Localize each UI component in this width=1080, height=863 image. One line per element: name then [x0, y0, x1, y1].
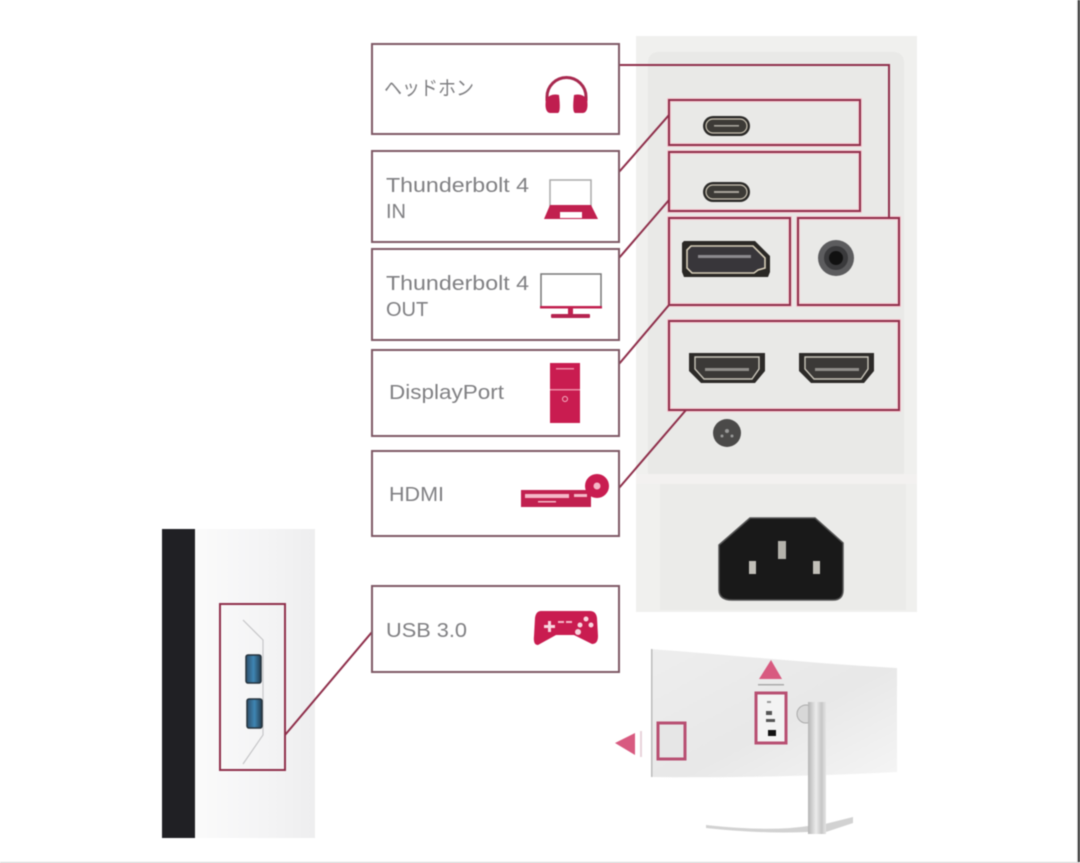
stand base [706, 817, 853, 832]
label text: HDMI [389, 484, 444, 506]
icon: disc player [521, 474, 609, 507]
port: USB-C lower [703, 182, 750, 202]
panel: Thunderbolt IN label [372, 151, 619, 242]
line: Thunderbolt OUT [619, 200, 669, 258]
stand pole [808, 702, 826, 834]
panel: Thunderbolt IN label: IN [386, 201, 406, 223]
frame: HDMI ports [669, 321, 899, 410]
label text: Thunderbolt 4 [386, 273, 529, 295]
panel: side USB photo [162, 529, 315, 838]
label text: DisplayPort [389, 382, 504, 404]
panel: headphone label [372, 44, 619, 134]
panel: rear port photo [636, 36, 917, 612]
screw [713, 419, 741, 447]
panel: monitor rear thumbnail [615, 649, 897, 834]
port: HDMI left [689, 353, 765, 383]
power inlet [719, 518, 843, 600]
port: USB upper [246, 655, 261, 683]
port: DisplayPort [682, 241, 770, 277]
panel: DisplayPort label [372, 350, 619, 436]
port: USB-C upper [703, 116, 750, 136]
marker: side ports [658, 723, 685, 759]
port: audio jack [818, 240, 854, 276]
arrow: left [615, 731, 642, 757]
icon: game controller [534, 611, 598, 645]
line: DisplayPort [619, 305, 669, 364]
frame: Thunderbolt IN port [669, 100, 860, 145]
connector lines and port frames [669, 100, 899, 410]
port: USB lower [247, 699, 262, 728]
line: USB [285, 632, 372, 735]
panel: Thunderbolt OUT label [372, 249, 619, 340]
frame: USB ports [220, 604, 285, 770]
frame: line headphone [619, 65, 889, 218]
line: HDMI [619, 410, 686, 488]
icon: headphones [546, 78, 588, 113]
panel: USB 3.0 label [372, 586, 619, 672]
icon: monitor [540, 274, 602, 318]
label text: USB 3.0 [386, 620, 467, 642]
frame: headphone port [798, 218, 899, 305]
port: HDMI right [799, 353, 874, 383]
arrow: up [758, 660, 784, 686]
marker: rear ports [756, 693, 786, 743]
label text: Thunderbolt 4 [386, 175, 529, 197]
icon: laptop [544, 180, 598, 219]
icon: desktop tower [550, 363, 580, 423]
frame: DisplayPort port [669, 218, 790, 305]
line: Thunderbolt IN [619, 115, 669, 172]
panel: Thunderbolt OUT label: OUT [386, 299, 428, 321]
label text: ヘッドホン [384, 78, 474, 100]
frame: Thunderbolt OUT port [669, 152, 860, 211]
panel: HDMI label [372, 451, 619, 536]
